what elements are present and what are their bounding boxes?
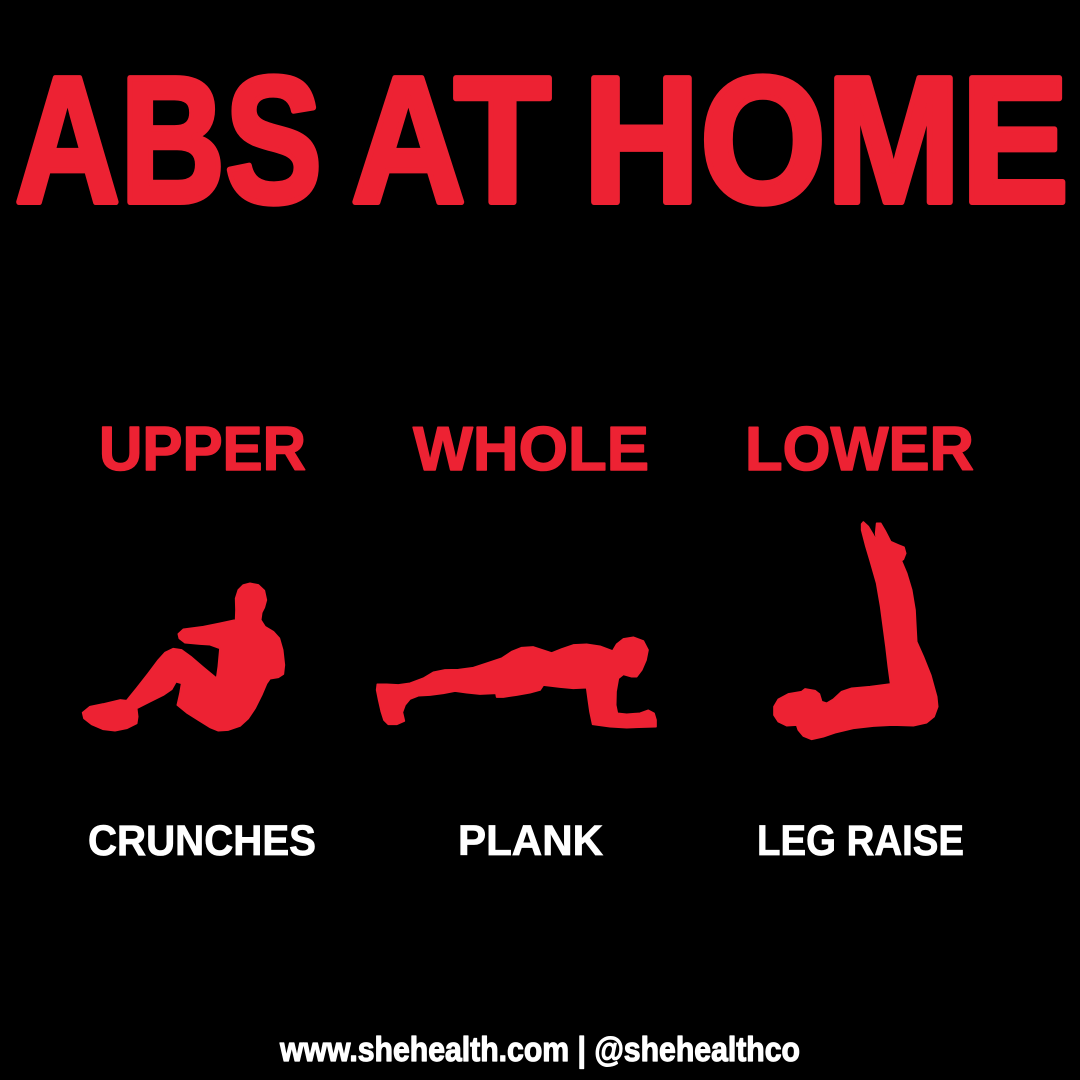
heading: upper: UPPER [99, 415, 306, 484]
icon: leg raise silhouette [774, 522, 938, 739]
title: AT [351, 40, 551, 241]
heading: lower: LOWER [745, 415, 974, 484]
icon: plank silhouette [377, 637, 656, 728]
title [15, 40, 1069, 241]
title: ABS [15, 40, 322, 241]
heading: whole: WHOLE [413, 415, 649, 484]
footer: website and handle: www.shehealth.com | @shehealthco [279, 1031, 800, 1069]
label: plank: PLANK [458, 817, 603, 865]
label: crunches: CRUNCHES [88, 817, 316, 865]
icon: crunches silhouette [83, 583, 284, 731]
label: leg raise: LEG RAISE [757, 817, 964, 865]
